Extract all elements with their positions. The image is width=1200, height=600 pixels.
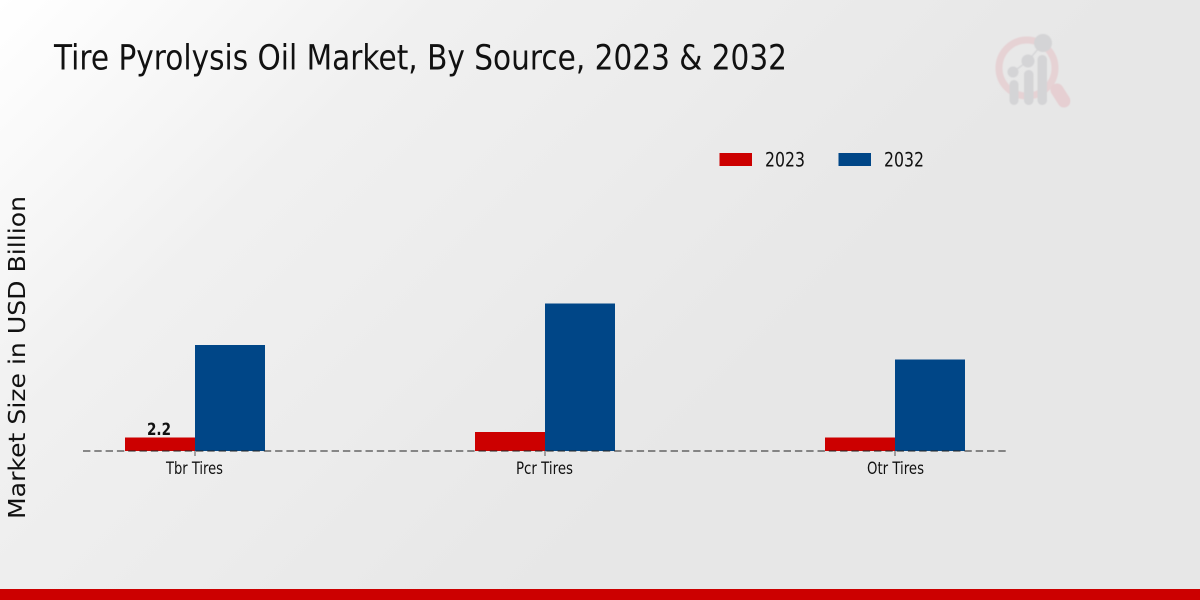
bars: Pcr Tires	[475, 304, 615, 451]
legend	[720, 148, 924, 172]
bar chart	[83, 304, 1007, 478]
baseline axis	[83, 450, 1007, 452]
legend label 2023: 2023	[765, 148, 805, 172]
title: Tire Pyrolysis Oil Market, By Source, 2023 & 2032	[53, 38, 787, 78]
legend swatch 2023	[720, 153, 752, 166]
category label Otr Tires: Otr Tires	[867, 459, 924, 478]
bars: Tbr Tires	[125, 345, 265, 451]
category label Pcr Tires: Pcr Tires	[516, 459, 573, 478]
bottom red band	[0, 589, 1200, 600]
bars: Otr Tires	[825, 360, 965, 451]
category label Tbr Tires: Tbr Tires	[165, 459, 223, 478]
y axis title: Market Size in USD Billion	[5, 196, 31, 519]
icon: watermark logo	[999, 34, 1064, 105]
data label: 2.2	[147, 420, 171, 440]
legend swatch 2032	[838, 153, 871, 166]
legend label 2032: 2032	[884, 148, 924, 172]
